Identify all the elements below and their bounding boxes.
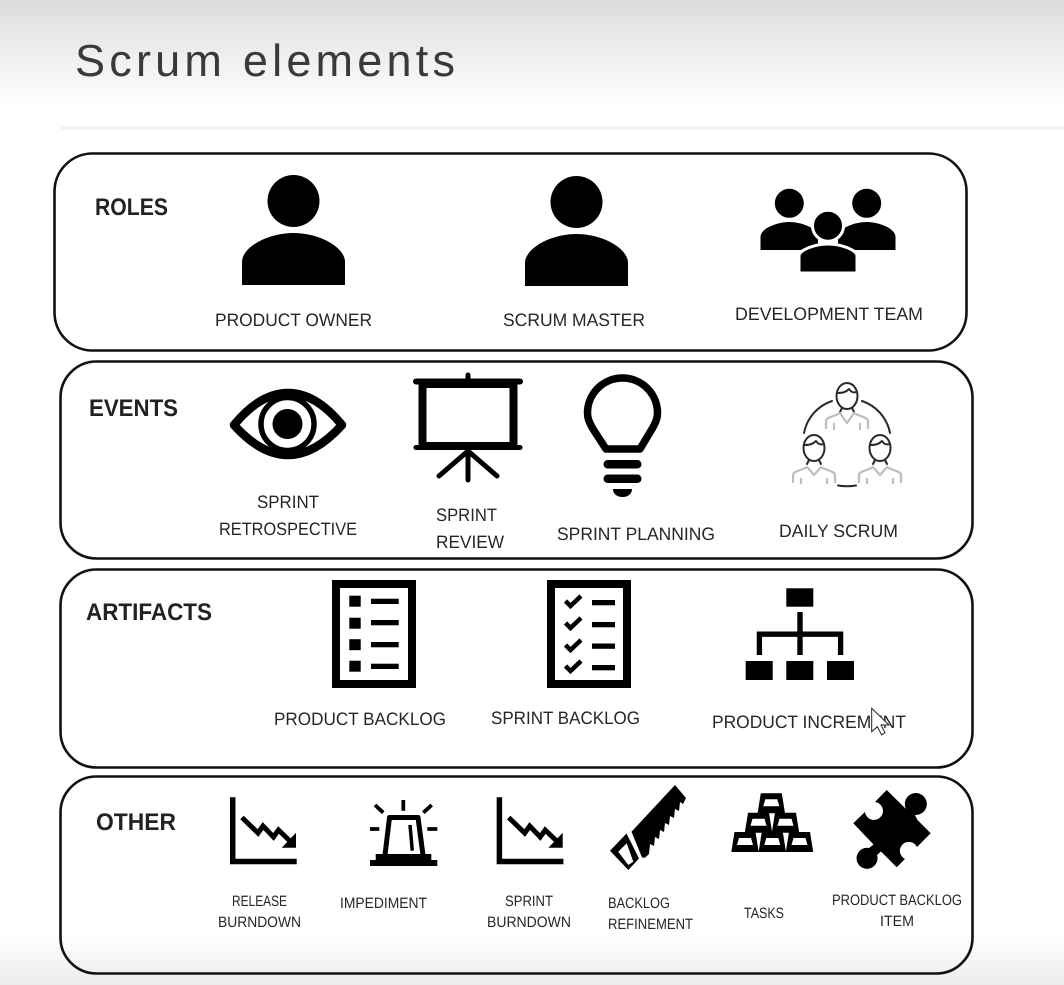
label: product owner: PRODUCT OWNER xyxy=(215,310,372,330)
label: scrum master: SCRUM MASTER xyxy=(503,310,645,330)
title: Scrum elements xyxy=(75,35,455,86)
label: sprint backlog: SPRINT BACKLOG xyxy=(491,708,640,728)
label: tasks: TASKS xyxy=(744,905,784,922)
label: sprint review: SPRINT xyxy=(436,505,497,525)
label: release burndown: BURNDOWN xyxy=(218,914,301,931)
label: impediment: IMPEDIMENT xyxy=(340,895,427,912)
heading: roles: ROLES xyxy=(95,194,168,221)
label: sprint retrospective: RETROSPECTIVE xyxy=(219,519,357,539)
panel: events xyxy=(60,362,972,558)
icon: presentation board xyxy=(416,375,520,480)
label: sprint burndown xyxy=(487,893,571,931)
label: sprint retrospective xyxy=(219,492,357,539)
icon: eye xyxy=(234,393,342,455)
label: sprint review: REVIEW xyxy=(436,532,504,552)
icon: mouse cursor xyxy=(872,708,889,735)
label: product increment: PRODUCT INCREMENT xyxy=(712,712,906,732)
icon: product increment hierarchy xyxy=(746,588,854,680)
icon: product backlog list xyxy=(336,584,412,684)
icon: puzzle piece xyxy=(853,790,931,869)
icon: impediment siren xyxy=(370,800,437,866)
label: daily scrum: DAILY SCRUM xyxy=(779,521,898,541)
panel: roles xyxy=(54,154,966,350)
icon: sprint burndown chart xyxy=(499,797,563,862)
label: backlog refinement: REFINEMENT xyxy=(608,916,693,933)
label: product backlog item: PRODUCT BACKLOG xyxy=(832,892,962,909)
panel: artifacts xyxy=(60,570,972,768)
label: sprint burndown: BURNDOWN xyxy=(487,914,571,931)
icon: light bulb xyxy=(588,378,658,497)
label: sprint burndown: SPRINT xyxy=(505,893,553,910)
heading: artifacts: ARTIFACTS xyxy=(86,599,212,626)
panel: other xyxy=(60,776,972,974)
icon: daily scrum group xyxy=(793,383,901,486)
label: release burndown: RELEASE xyxy=(232,893,287,910)
icon: release burndown chart xyxy=(233,797,297,862)
label: sprint review xyxy=(436,505,504,552)
label: sprint retrospective: SPRINT xyxy=(257,492,319,512)
label: product backlog item: ITEM xyxy=(880,913,914,930)
label: release burndown xyxy=(218,893,301,931)
icon: development team xyxy=(760,189,896,273)
label: backlog refinement xyxy=(608,895,693,933)
icon: saw xyxy=(610,785,686,870)
label: sprint planning: SPRINT PLANNING xyxy=(557,524,715,544)
icon: sprint backlog checklist xyxy=(551,584,627,684)
label: development team: DEVELOPMENT TEAM xyxy=(735,304,923,324)
heading: other: OTHER xyxy=(96,809,176,836)
icon: scrum master xyxy=(525,176,628,286)
icon: tasks gold bars xyxy=(731,793,813,852)
label: backlog refinement: BACKLOG xyxy=(608,895,670,912)
label: product backlog item xyxy=(832,892,962,930)
heading: events: EVENTS xyxy=(89,395,178,422)
icon: product owner xyxy=(242,175,345,285)
label: product backlog: PRODUCT BACKLOG xyxy=(274,709,446,729)
